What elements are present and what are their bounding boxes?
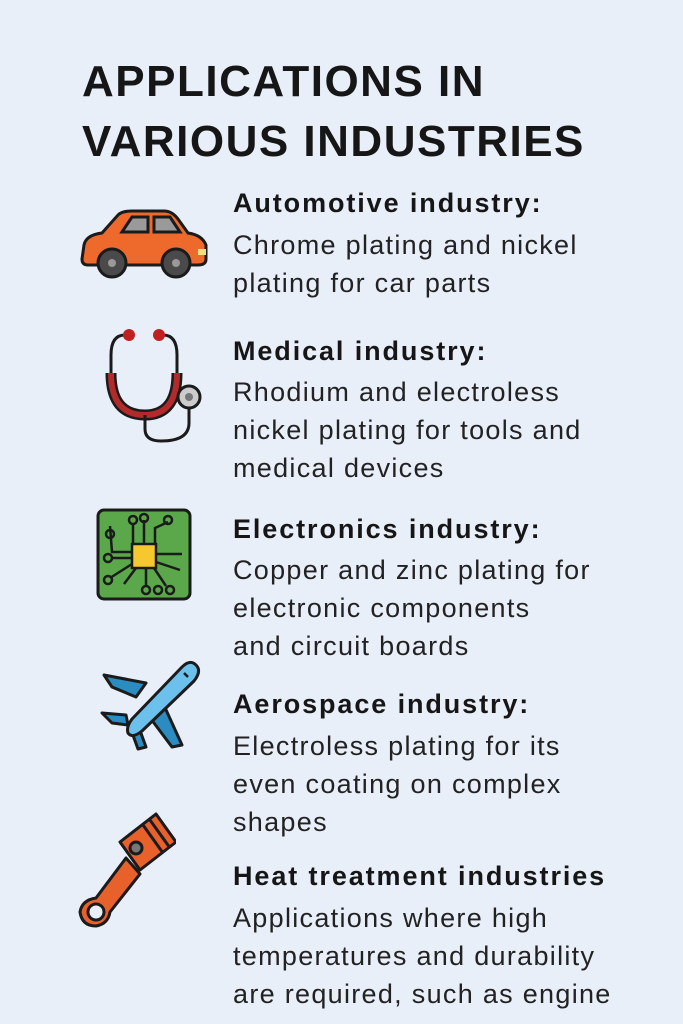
heading: heat treatment: Heat treatment industries (233, 861, 606, 891)
icon: piston (78, 812, 176, 928)
text: aerospace (233, 731, 562, 837)
text: aerospace: even coating on complex (233, 769, 562, 799)
heading: medical: Medical industry: (233, 336, 487, 366)
text: heat treatment: are required, such as engine (233, 979, 612, 1009)
text: heat treatment: temperatures and durability (233, 941, 595, 971)
title (82, 57, 585, 166)
text: automotive: plating for car parts (233, 268, 491, 298)
heading: aerospace: Aerospace industry: (233, 689, 530, 719)
icon: car (80, 210, 208, 278)
text: electronics: and circuit boards (233, 631, 470, 661)
text: heat treatment: Applications where high (233, 903, 548, 933)
text: heat treatment (233, 903, 612, 1009)
title: APPLICATIONS IN (82, 57, 485, 106)
text: electronics (233, 555, 591, 661)
text: aerospace: Electroless plating for its (233, 731, 561, 761)
title: VARIOUS INDUSTRIES (82, 117, 585, 166)
text: medical (233, 377, 582, 483)
text: automotive (233, 230, 578, 298)
text: automotive: Chrome plating and nickel (233, 230, 578, 260)
heading: automotive: Automotive industry: (233, 188, 543, 218)
text: electronics: Copper and zinc plating for (233, 555, 591, 585)
heading: electronics: Electronics industry: (233, 514, 541, 544)
text: aerospace: shapes (233, 807, 328, 837)
text: medical: medical devices (233, 453, 445, 483)
icon: circuit (96, 508, 192, 600)
text: electronics: electronic components (233, 593, 530, 623)
icon: airplane (100, 660, 200, 750)
icon: stethoscope (106, 329, 202, 442)
text: medical: Rhodium and electroless (233, 377, 560, 407)
text: medical: nickel plating for tools and (233, 415, 582, 445)
